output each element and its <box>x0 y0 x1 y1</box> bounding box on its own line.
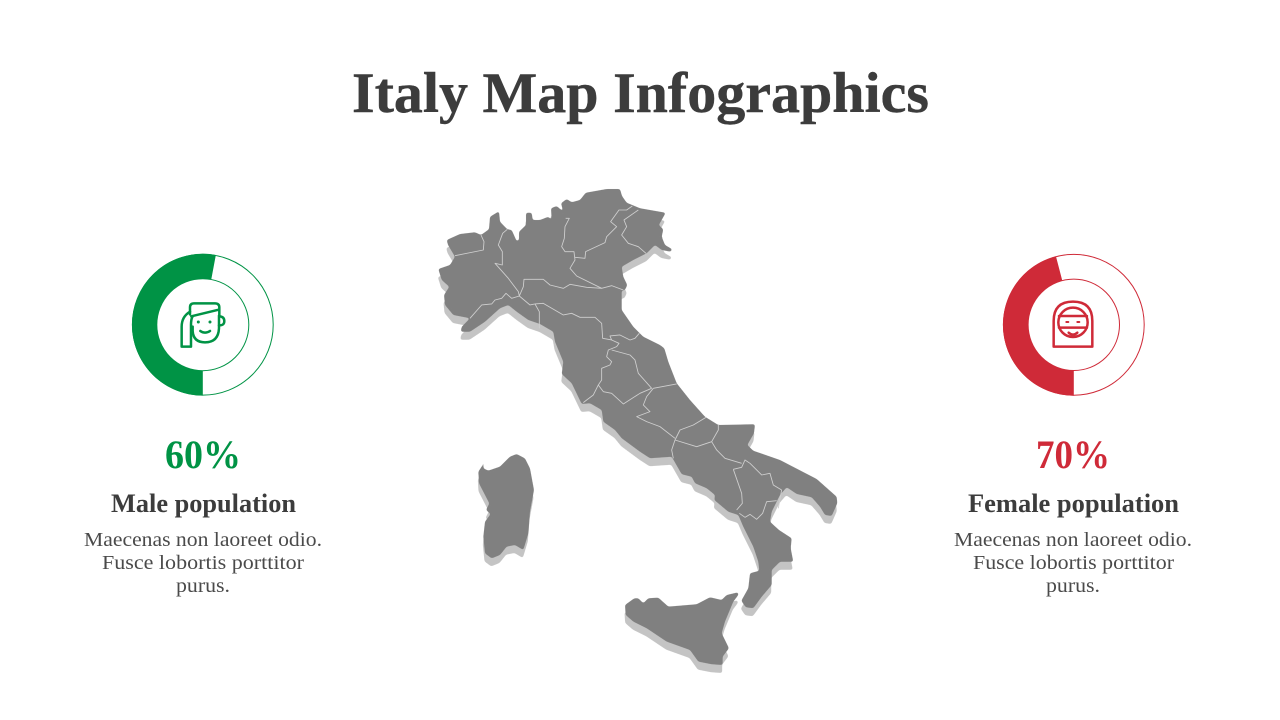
mainland Italy <box>438 189 837 608</box>
heading: female population: Female population <box>968 489 1180 518</box>
donut chart: female 70% <box>1003 254 1144 396</box>
southern region borders <box>672 417 782 519</box>
text block: male description: Maecenas non laoreet odio. <box>84 529 322 551</box>
percentage: 60%: 60% <box>165 432 241 477</box>
panel: female population <box>954 254 1192 597</box>
title: Italy Map Infographics <box>352 62 929 125</box>
text block: male description: purus. <box>176 575 230 597</box>
text block: male description <box>84 529 322 597</box>
donut chart: male 60% <box>132 254 273 396</box>
map land masses <box>438 189 837 665</box>
map of Italy <box>438 189 837 673</box>
northern and central region borders <box>455 206 677 438</box>
heading: male population: Male population <box>111 489 297 518</box>
percentage: 70%: 70% <box>1036 432 1110 477</box>
Sardinia <box>478 454 534 558</box>
icon: male face with cap <box>182 303 224 347</box>
map shadow <box>438 197 837 673</box>
text block: female description: Maecenas non laoreet odio. <box>954 529 1192 551</box>
text block: female description: purus. <box>1046 575 1100 597</box>
panel: male population <box>84 254 322 597</box>
icon: female face with headscarf <box>1054 302 1092 347</box>
text block: female description <box>954 529 1192 597</box>
text block: female description: Fusce lobortis porttitor <box>973 552 1174 574</box>
text block: male description: Fusce lobortis porttitor <box>102 552 304 574</box>
Sicily <box>625 592 738 665</box>
